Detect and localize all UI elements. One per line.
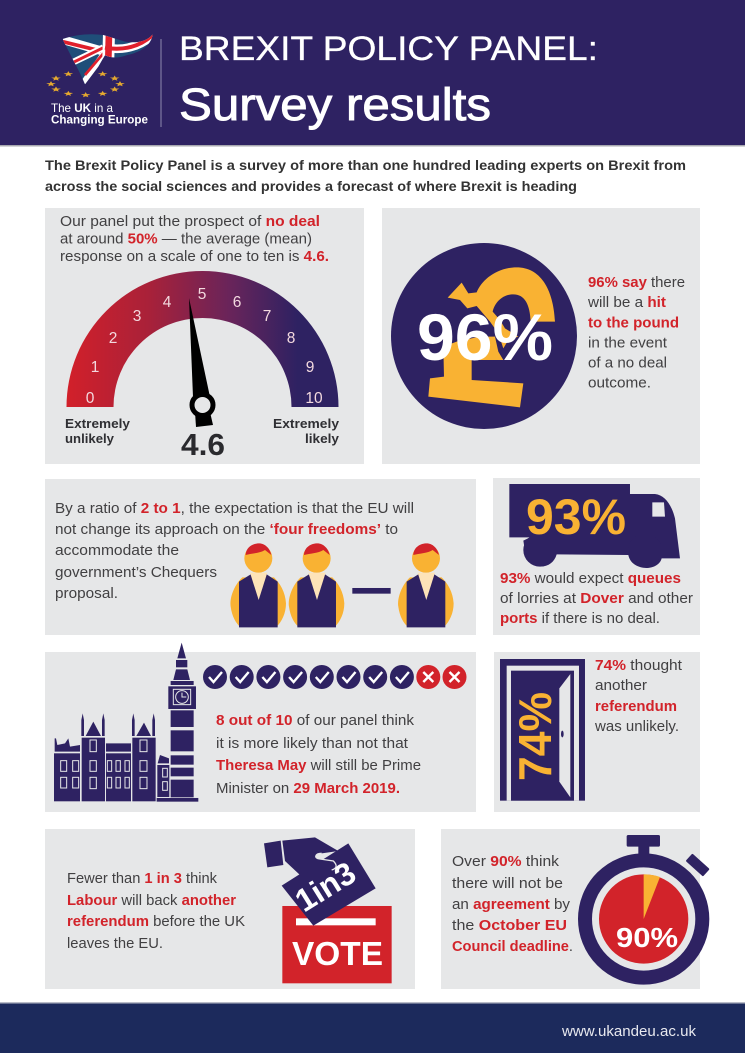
- panel text: 8 out of 10 of our panel think: [216, 713, 408, 729]
- intro text: The Brexit Policy Panel is a survey of more than one hundred leading experts on Brexit from: [45, 158, 686, 173]
- stat: 74%: 74%: [509, 692, 561, 781]
- logo text: The UK in a: [51, 101, 114, 115]
- panel: no deal gauge: [45, 208, 364, 464]
- panel text: ports if there is no deal.: [500, 611, 656, 627]
- icon: ring of stars: [46, 71, 125, 97]
- panel text: not change its approach on the ‘four freedoms’ to: [55, 522, 397, 538]
- scale labels: unlikely: [65, 431, 115, 446]
- panel text: outcome.: [588, 376, 651, 392]
- panel text: it is more likely than not that: [216, 736, 408, 752]
- panel: Labour referendum vote: [45, 829, 415, 989]
- panel text: government’s Chequers: [55, 565, 217, 581]
- panel text: will be a hit: [588, 295, 665, 311]
- intro text: across the social sciences and provides a forecast of where Brexit is heading: [45, 179, 577, 194]
- panel text: 74% thought: [595, 658, 678, 674]
- panel text: of lorries at Dover and other: [500, 591, 689, 607]
- panel text: Minister on 29 March 2019.: [216, 781, 397, 797]
- panel text: proposal.: [55, 586, 118, 602]
- VOTE label: VOTE: [292, 935, 383, 972]
- panel text: the October EU: [452, 918, 559, 934]
- panel text: accommodate the: [55, 543, 179, 559]
- panel: hit to the pound: [382, 208, 700, 464]
- icon: broken pound in circle: [391, 243, 577, 429]
- stat: 93%: 93%: [526, 489, 626, 545]
- panel text: Our panel put the prospect of no deal: [60, 214, 316, 230]
- panel text: an agreement by: [452, 897, 569, 913]
- stat: 1 in 3: 1in3: [289, 854, 362, 919]
- panel text: Council deadline.: [452, 939, 573, 955]
- panel text: Over 90% think: [452, 854, 556, 870]
- scale labels: Extremely: [65, 416, 131, 431]
- panel text: referendum before the UK: [67, 914, 242, 930]
- panel: another referendum door: [494, 652, 700, 812]
- panel text: By a ratio of 2 to 1, the expectation is that the EU will: [55, 501, 402, 517]
- panel: no deal gauge: Extremely: [273, 416, 340, 431]
- header band: [0, 0, 745, 146]
- logo: [46, 32, 155, 126]
- panel text: another: [595, 678, 647, 694]
- panel text: of a no deal: [588, 356, 667, 372]
- gauge numbers: 2: [109, 330, 117, 347]
- icon: door: [500, 659, 585, 801]
- panel text: was unlikely.: [594, 719, 679, 735]
- panel text: response on a scale of one to ten is 4.6.: [60, 249, 328, 265]
- icon: two people versus one: [230, 543, 454, 627]
- panel text: at around 50% — the average (mean): [60, 232, 307, 248]
- gauge numbers: 0: [86, 390, 95, 407]
- panel: lorry queues: [493, 478, 700, 635]
- panel: four freedoms: [45, 479, 476, 635]
- panel text: leaves the EU.: [67, 936, 163, 952]
- stat: 96%: 96%: [417, 300, 553, 374]
- gauge numbers: 6: [233, 294, 241, 311]
- icon: ballot box and hand: [264, 837, 392, 983]
- stat: 90%: 90%: [616, 922, 678, 953]
- panel: Theresa May: [45, 643, 476, 812]
- website: www.ukandeu.ac.uk: [561, 1023, 696, 1040]
- footer band: [0, 1002, 745, 1053]
- panel text: referendum: [595, 699, 677, 715]
- panel text: Theresa May will still be Prime: [216, 758, 418, 774]
- panel text: there will not be: [452, 876, 563, 892]
- icon: stopwatch: [585, 835, 710, 978]
- title: BREXIT POLICY PANEL:: [179, 30, 598, 68]
- gauge numbers: 4: [163, 294, 172, 311]
- gauge numbers: 9: [306, 359, 314, 376]
- gauge numbers: 3: [133, 308, 141, 325]
- gauge needle: [189, 298, 213, 427]
- panel text: 93% would expect queues: [500, 571, 678, 587]
- gauge arc: [66, 271, 338, 407]
- gauge numbers: 7: [263, 308, 271, 325]
- panel text: Labour will back another: [67, 893, 235, 909]
- gauge numbers: 10: [305, 390, 323, 407]
- icon: lorry: [509, 484, 680, 568]
- gauge numbers: 1: [91, 359, 99, 376]
- icon: union flag: [62, 34, 152, 84]
- panel text: 96% say there: [588, 275, 684, 291]
- gauge value: 4.6: [181, 427, 225, 462]
- panel text: to the pound: [588, 316, 679, 332]
- subtitle: Survey results: [179, 79, 491, 130]
- panel: no deal gauge: likely: [305, 431, 340, 446]
- icon: 8 ticks and 2 crosses: [203, 665, 466, 689]
- gauge numbers: 8: [287, 330, 295, 347]
- panel text: Fewer than 1 in 3 think: [67, 871, 217, 887]
- gauge numbers: 5: [198, 286, 206, 303]
- icon: Big Ben and Parliament: [54, 643, 198, 802]
- panel text: in the event: [588, 336, 667, 352]
- panel: October deadline stopwatch: [441, 829, 710, 989]
- logo text: Changing Europe: [51, 112, 148, 126]
- gauge numbers: [86, 286, 323, 407]
